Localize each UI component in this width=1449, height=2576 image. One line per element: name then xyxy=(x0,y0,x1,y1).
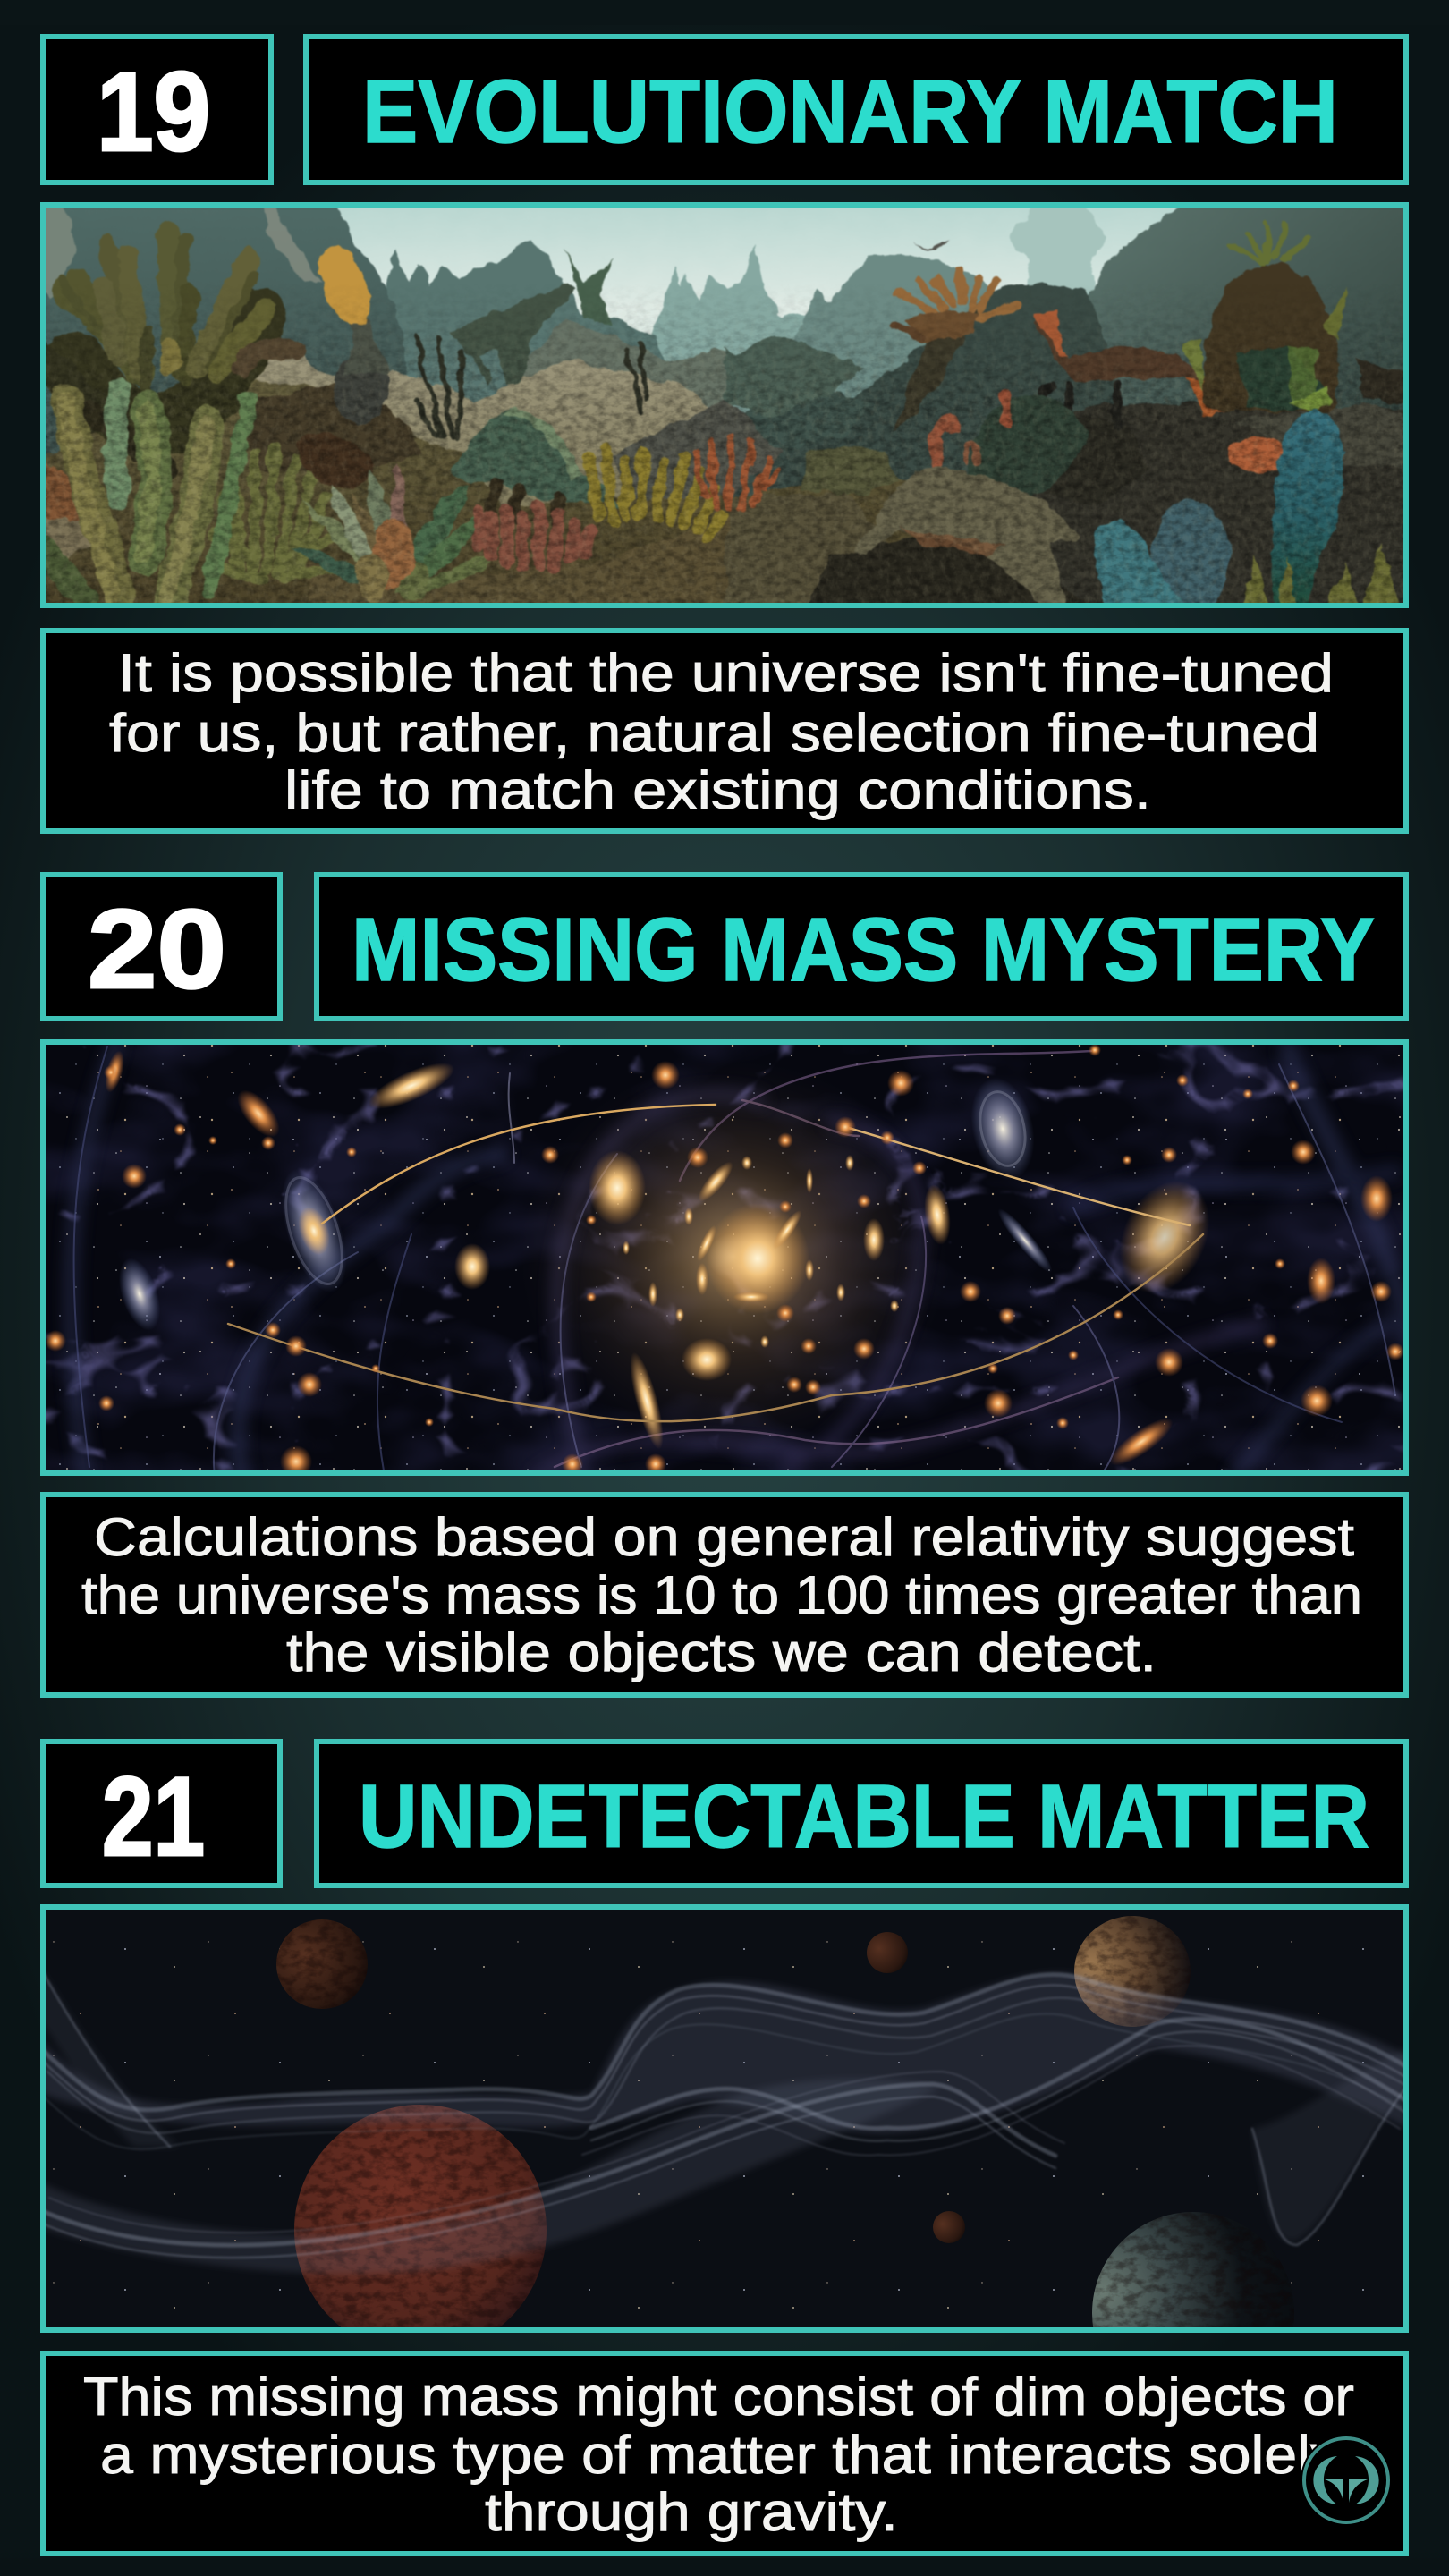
small brown creature xyxy=(289,423,382,500)
heading: missing mass mystery xyxy=(317,875,1406,1019)
logo badge xyxy=(1301,2435,1392,2526)
rock texture overlays xyxy=(40,202,1409,608)
yellow pod plant xyxy=(334,356,387,424)
body text 21 xyxy=(43,2353,1406,2554)
illustration: alien landscape with creatures and plants xyxy=(40,202,1409,611)
dark central ridge xyxy=(733,281,1115,497)
section 21: undetectable matter xyxy=(33,1741,1416,2554)
body text 20: Calculations based on general relativity suggest xyxy=(94,1507,1354,1567)
wisps: veils xyxy=(40,1968,1409,2274)
orange stems xyxy=(936,394,1006,462)
long-necked plant creature xyxy=(447,283,575,386)
body text 21: This missing mass might consist of dim objects or xyxy=(83,2367,1354,2427)
flying creature xyxy=(914,240,952,252)
wisps: strands xyxy=(33,1968,1416,2258)
foreground ground xyxy=(46,379,906,603)
yellow shrubs xyxy=(588,448,720,538)
body text 19: It is possible that the universe isn't fine-tuned xyxy=(118,643,1334,703)
orange rock xyxy=(40,462,94,542)
pineapple plant xyxy=(1203,224,1348,412)
body text 19 xyxy=(43,631,1406,831)
bright galaxies xyxy=(101,1048,1393,1473)
body text 20: the universe's mass is 10 to 100 times greater than xyxy=(81,1565,1362,1625)
number box 21: 21 xyxy=(102,1755,205,1879)
left cactus cluster xyxy=(40,233,295,470)
number box 21 xyxy=(43,1741,280,1885)
tower silhouette xyxy=(1009,208,1106,295)
lensing arcs xyxy=(228,1105,1203,1421)
heading: undetectable matter: UNDETECTABLE MATTER xyxy=(359,1767,1369,1867)
number box 20 xyxy=(43,875,280,1019)
dark matter filaments xyxy=(72,1042,1409,1476)
far spires xyxy=(651,244,806,413)
number box 20: 20 xyxy=(88,887,226,1012)
body text 19: life to match existing conditions. xyxy=(284,760,1151,820)
section 19: evolutionary match xyxy=(40,37,1409,831)
pink succulents xyxy=(479,506,590,564)
section 20: missing mass mystery xyxy=(40,875,1409,1695)
dark green bush xyxy=(968,394,1088,506)
dark rocks right xyxy=(1031,401,1403,603)
red shrub xyxy=(695,439,778,506)
planets xyxy=(276,1919,368,2009)
heading: evolutionary match: EVOLUTIONARY MATCH xyxy=(362,62,1338,162)
orange fin creature xyxy=(1035,311,1239,439)
sky xyxy=(336,208,1181,335)
body text 20 xyxy=(43,1495,1406,1695)
scattered stars xyxy=(45,1044,1404,1478)
body text 21: a mysterious type of matter that interacts solely xyxy=(100,2425,1340,2485)
heading: undetectable matter xyxy=(317,1741,1406,1885)
yellow ferns xyxy=(1243,542,1400,608)
sloth creature xyxy=(856,466,1078,608)
olive shrub xyxy=(215,448,331,578)
illustration frame xyxy=(43,205,1406,606)
illustration frame xyxy=(43,1042,1406,1473)
orange mushroom xyxy=(1229,437,1310,472)
tall foreground leaves xyxy=(40,388,248,600)
armored dinosaur xyxy=(450,406,622,511)
heading: evolutionary match xyxy=(306,37,1406,182)
body text 19: for us, but rather, natural selection fine-tuned xyxy=(109,703,1319,763)
number box 19 xyxy=(43,37,271,182)
tall blue cactus xyxy=(1272,410,1344,608)
agave plant xyxy=(291,462,501,609)
heading: missing mass mystery: MISSING MASS MYSTERY xyxy=(352,900,1375,1000)
body text 20: the visible objects we can detect. xyxy=(286,1623,1157,1682)
mid mountains xyxy=(385,240,665,404)
hill behind long-necked creature xyxy=(524,319,728,408)
blue pods xyxy=(1153,500,1230,611)
central cluster glow xyxy=(519,1060,948,1453)
body text 21: through gravity. xyxy=(485,2482,898,2542)
illustration: galaxy cluster and gravitational lensing xyxy=(40,1039,1409,1478)
illustration frame xyxy=(43,1907,1406,2330)
right mountain xyxy=(1088,208,1403,411)
number box 19: 19 xyxy=(97,50,210,174)
left mountain xyxy=(40,202,416,453)
planet mottling xyxy=(268,1914,1306,2334)
illustration: planets and dark matter wisps xyxy=(33,1904,1416,2414)
tan middle hills xyxy=(254,355,708,507)
reeds xyxy=(417,338,647,439)
coral plant xyxy=(894,269,1015,435)
